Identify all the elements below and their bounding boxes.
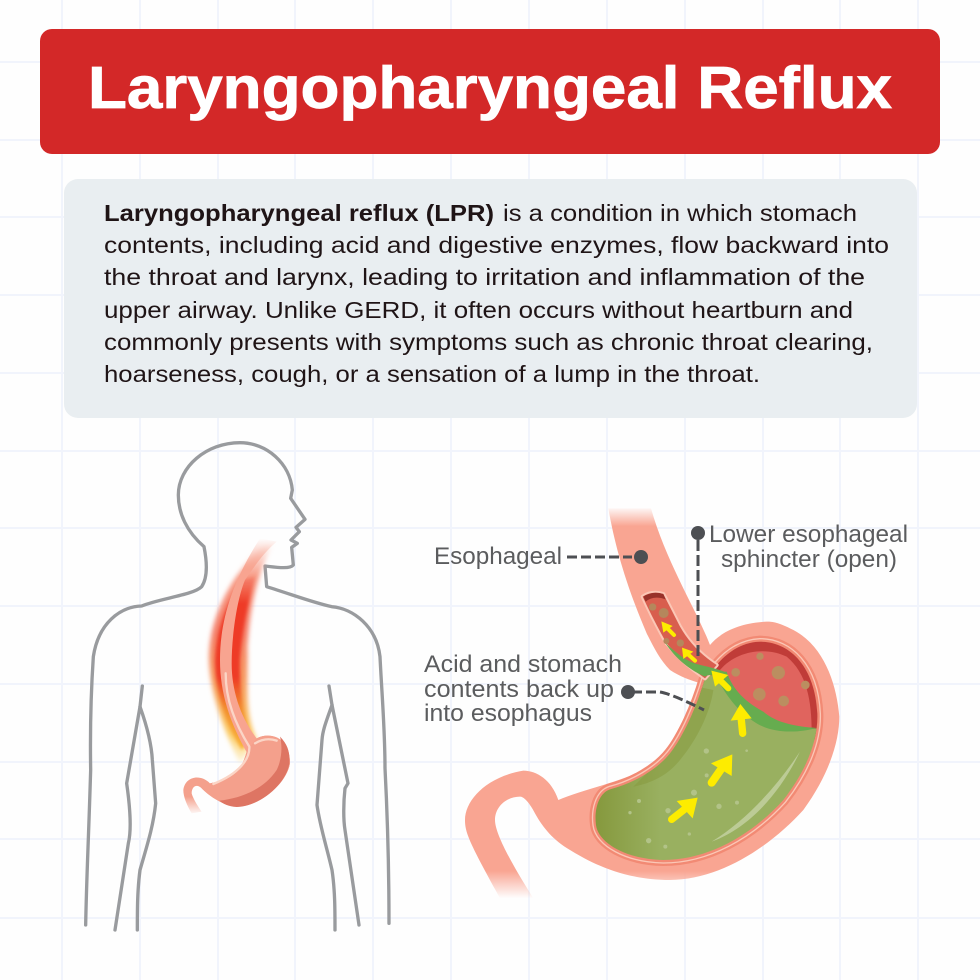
label: Lower esophageal sphincter <box>691 521 908 656</box>
inner inflammation <box>215 577 255 750</box>
definition text: upper airway. Unlike GERD, it often occurs without heartburn and <box>104 297 853 323</box>
panel: definition <box>64 179 917 418</box>
body illustration <box>86 443 389 930</box>
label: Acid and stomach contents <box>424 651 704 727</box>
leader: Esophageal <box>567 550 648 564</box>
label: Lower esophageal sphincter: Lower esophageal <box>709 521 908 548</box>
label: Esophageal: Esophageal <box>434 543 562 570</box>
definition text: contents, including acid and digestive enzymes, flow backward into <box>104 232 889 258</box>
stomach and esophagus wall <box>465 508 839 898</box>
label: Acid and stomach contents: Acid and stomach <box>424 651 622 678</box>
air pocket <box>700 642 818 740</box>
definition text: Laryngopharyngeal reflux (LPR) <box>104 200 494 226</box>
esophagus tube <box>220 538 277 755</box>
label: Acid and stomach contents: into esophagus <box>424 700 592 727</box>
stomach cavity contents <box>596 642 818 860</box>
leader: sphincter <box>691 526 705 656</box>
yellow arrows <box>667 628 743 819</box>
title banner <box>40 29 940 154</box>
label: Esophageal <box>434 543 648 570</box>
definition text: hoarseness, cough, or a sensation of a lump in the throat. <box>104 361 760 387</box>
definition text: is a condition in which stomach <box>503 200 857 226</box>
definition text: commonly presents with symptoms such as chronic throat clearing, <box>104 329 873 355</box>
acid surface <box>713 672 817 732</box>
acid liquid <box>596 675 816 860</box>
esophagus inflammation glow <box>209 543 273 763</box>
esophagus opening <box>643 593 728 682</box>
stomach lining <box>596 642 817 860</box>
small stomach <box>183 673 290 813</box>
label: Acid and stomach contents: contents back up <box>424 676 614 703</box>
bubbles <box>731 653 810 706</box>
definition text: the throat and larynx, leading to irritation and inflammation of the <box>104 264 865 290</box>
liquid sheen <box>712 752 800 842</box>
title: Laryngopharyngeal Reflux <box>88 55 892 121</box>
reflux stream <box>665 643 728 682</box>
definition text <box>104 200 889 387</box>
leader: acid <box>621 685 704 710</box>
stomach diagram <box>465 508 839 898</box>
body silhouette <box>86 443 389 930</box>
label: Lower esophageal sphincter: sphincter (open) <box>721 546 897 573</box>
